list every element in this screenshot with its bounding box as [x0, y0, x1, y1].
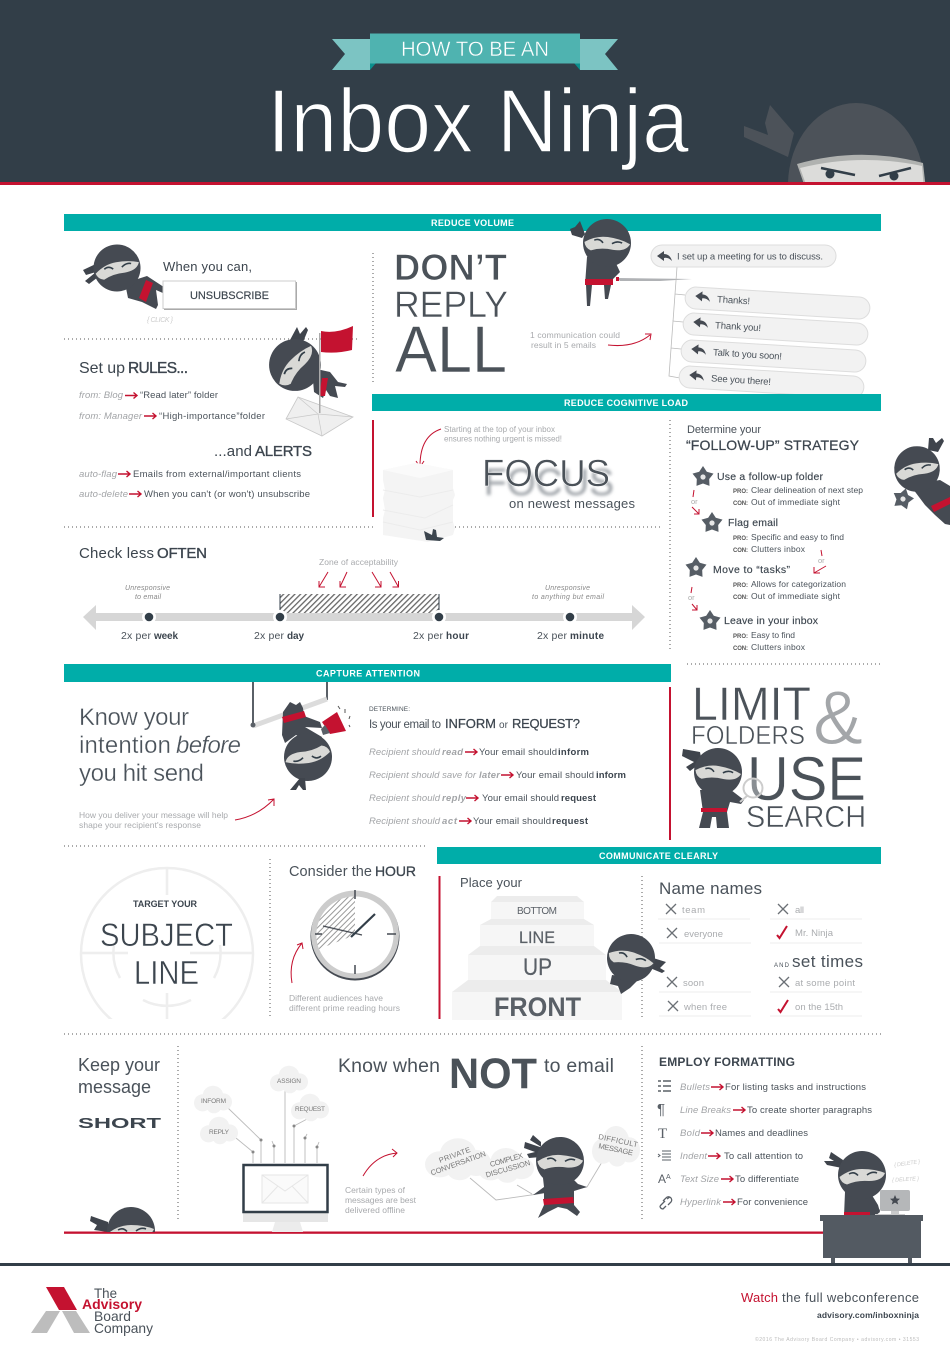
heading: and set times: set times	[792, 952, 863, 971]
cloud: difficult message: MESSAGE	[598, 1141, 634, 1157]
determine heading: DETERMINE:	[369, 706, 410, 713]
item: when free: when free	[683, 1002, 727, 1013]
ribbon: how to be an	[332, 34, 618, 70]
rule 2: from: Manager	[79, 411, 143, 422]
text: short: SHORT	[78, 1115, 161, 1132]
timeline labels: 2x per	[537, 630, 568, 642]
heading	[686, 424, 860, 453]
footer call to action: Watch	[741, 1290, 778, 1305]
row: line breaks: To create shorter paragraphs	[747, 1105, 872, 1116]
headline	[394, 247, 508, 386]
timeline labels: 2x per	[254, 630, 284, 642]
determine heading: or	[499, 720, 509, 731]
ninja flying toward button	[83, 241, 176, 309]
unsubscribe button	[163, 281, 297, 310]
timeline labels: hour	[446, 631, 469, 642]
reply: talk to you soon: Talk to you soon!	[713, 347, 782, 363]
row: read: Your email should	[479, 747, 557, 758]
text: target your: TARGET YOUR	[133, 899, 198, 909]
row: text size: A	[666, 1174, 671, 1181]
headline: intention	[79, 732, 171, 759]
row: line breaks: ¶	[657, 1101, 665, 1118]
heading: Check less	[79, 545, 154, 562]
ninja with magnifier	[682, 744, 762, 828]
footer logo	[31, 1285, 153, 1336]
ninja with sword	[570, 216, 692, 306]
header ninja peeking	[744, 103, 926, 182]
text: subject line	[100, 917, 233, 991]
text: subject line: LINE	[134, 954, 199, 991]
cloud: difficult message: DIFFICULT	[598, 1132, 639, 1149]
cloud: complex discussion	[478, 1148, 534, 1183]
list underlines	[658, 919, 862, 1016]
row: indent: To call attention to	[724, 1151, 803, 1162]
heading: set up rules: Set up	[79, 360, 125, 377]
reply: thanks: Thanks!	[717, 294, 750, 307]
note: different audiences: Different audiences have	[289, 993, 383, 1003]
focus wordmark with blurred echo: FOCUS	[482, 453, 610, 495]
headline: Know your	[79, 704, 189, 731]
footer logo: Board	[94, 1308, 131, 1324]
clock	[310, 890, 400, 980]
panel: limit folders and use search	[682, 676, 866, 834]
rule 1	[79, 390, 218, 401]
or connectors: or	[818, 556, 825, 565]
panel: know when not to email	[194, 1050, 640, 1232]
ninja at desk: { DELETE }	[892, 1176, 919, 1184]
headline: before	[176, 732, 241, 759]
target graphic	[80, 867, 254, 1019]
row: save for later: Recipient should save for	[369, 770, 477, 781]
note: starting at top: Starting at the top of your inbox	[444, 425, 555, 434]
ninja peeking around divider	[601, 928, 666, 994]
item: on the 15th	[778, 1000, 843, 1013]
reply: see you there	[678, 366, 864, 394]
option: leave in inbox: CON:	[733, 646, 748, 652]
wordmark	[691, 676, 866, 834]
reply: see you there: See you there!	[711, 373, 771, 388]
copyright: ©2016 The Advisory Board Company • advisory.com • 31553	[755, 1336, 919, 1343]
cloud: reply	[200, 1117, 238, 1144]
item: all	[778, 904, 804, 916]
timeline labels: 2x per	[121, 630, 152, 642]
footer logo: Advisory	[82, 1296, 142, 1312]
note: starting at top	[416, 425, 562, 467]
option: flag email: PRO:	[733, 536, 748, 542]
item: everyone: everyone	[684, 929, 723, 940]
heading: and alerts	[214, 443, 312, 460]
item: team	[666, 904, 705, 916]
row: text size: To differentiate	[735, 1174, 799, 1185]
heading: EMPLOY FORMATTING	[659, 1055, 795, 1069]
cloud: inform: INFORM	[201, 1098, 226, 1105]
reply: thank you	[683, 312, 868, 346]
headline: you hit send	[79, 760, 204, 787]
footer rule	[0, 1263, 950, 1266]
cloud connector lines	[228, 1090, 319, 1163]
ninja peeking above rule	[90, 1207, 155, 1232]
reply: thanks	[685, 286, 870, 320]
option: move to tasks	[686, 557, 846, 601]
note: certain types: delivered offline	[345, 1205, 405, 1215]
text: when you can: When you can,	[163, 259, 252, 274]
item: soon	[667, 977, 704, 989]
wordmark: &	[813, 676, 863, 761]
timeline arrow	[83, 605, 645, 630]
cloud: difficult message	[592, 1126, 640, 1167]
row: read: read	[442, 747, 463, 758]
steps: BOTTOM	[517, 906, 557, 917]
cloud: private conversation	[425, 1138, 491, 1180]
panel: check less often	[79, 545, 645, 642]
row: act	[369, 816, 589, 827]
alert 1: Emails from external/important clients	[133, 469, 301, 480]
unsubscribe button: UNSUBSCRIBE	[190, 290, 269, 302]
item: mr ninja: Mr. Ninja	[795, 928, 834, 939]
heading	[289, 863, 416, 880]
ninja at desk	[824, 1151, 921, 1216]
main title: Inbox Ninja	[267, 72, 690, 172]
heading: Know when	[338, 1055, 440, 1077]
headline	[79, 704, 241, 787]
row: act: request	[552, 816, 589, 827]
desk	[820, 1215, 923, 1263]
row: read: inform	[558, 747, 589, 758]
item: when free	[668, 1001, 727, 1013]
panel: employ formatting	[657, 1055, 923, 1263]
dotted dividers	[64, 253, 881, 1220]
reply tree connector	[669, 267, 685, 378]
option: leave in inbox	[700, 610, 819, 652]
row: indent	[658, 1151, 803, 1162]
option: move to tasks: CON:	[733, 595, 748, 601]
timeline labels: day	[287, 631, 304, 642]
ninja juggling clouds	[524, 1135, 587, 1218]
text: place your: Place your	[460, 875, 523, 890]
panel: consider the hour	[289, 863, 416, 1013]
headline: DON’T	[394, 247, 507, 288]
rule 2	[79, 411, 265, 422]
heading: “FOLLOW-UP” STRATEGY	[686, 437, 860, 453]
ribbon: how to be an: HOW TO BE AN	[401, 38, 549, 61]
row: hyperlink: Hyperlink	[680, 1197, 722, 1208]
section bar: communicate clearly	[437, 847, 881, 864]
item: mr ninja	[777, 926, 834, 939]
hanging ninja with megaphone	[250, 682, 350, 790]
or connectors	[688, 490, 826, 610]
wordmark: SEARCH	[746, 799, 866, 834]
option: follow-up folder: Use a follow-up folder	[717, 471, 824, 483]
heading: NOT	[449, 1050, 537, 1098]
section bar: reduce cognitive load	[372, 394, 881, 411]
row: text size	[658, 1172, 799, 1186]
zone of acceptability	[280, 557, 440, 614]
string lines	[470, 1162, 602, 1200]
row: act: act	[442, 816, 458, 827]
wordmark: USE	[747, 745, 866, 814]
item: all: all	[795, 905, 804, 916]
heading: Consider the	[289, 864, 372, 880]
row: reply: Recipient should	[369, 793, 441, 804]
steps	[452, 896, 622, 1022]
heading: and alerts: ...and	[214, 443, 252, 460]
determine heading: INFORM	[445, 716, 496, 731]
row: indent: Indent	[680, 1151, 707, 1162]
panel: don't reply all	[394, 216, 870, 399]
heading: OFTEN	[157, 545, 207, 562]
text: keep your message: Keep your	[78, 1055, 160, 1075]
option: leave in inbox: Leave in your inbox	[724, 615, 819, 627]
zone of acceptability: Zone of acceptability	[319, 557, 399, 567]
rule 1: from: Blog	[79, 390, 124, 401]
row: line breaks	[657, 1101, 872, 1118]
option: follow-up folder: Out of immediate sight	[751, 497, 841, 507]
determine heading: Is your email to	[369, 719, 441, 731]
row: bullets	[658, 1081, 866, 1093]
reply: talk to you soon	[681, 339, 866, 373]
timeline labels: 2x per	[413, 630, 444, 642]
note: different audiences: different prime reading hours	[289, 1003, 400, 1013]
row: hyperlink: For convenience	[737, 1197, 808, 1208]
heading	[79, 545, 207, 562]
reply: thank you: Thank you!	[715, 320, 761, 334]
text: subject line: SUBJECT	[100, 917, 233, 953]
heading: set up rules: RULES...	[128, 360, 188, 377]
text: on newest messages: on newest messages	[509, 496, 636, 511]
heading: name names: Name names	[659, 879, 762, 898]
alert 2: auto-delete	[79, 489, 128, 500]
row: save for later: inform	[596, 770, 626, 781]
row: bold	[658, 1126, 808, 1142]
item: everyone	[667, 928, 723, 940]
panel: target subject line	[80, 867, 254, 1019]
determine heading	[369, 706, 580, 731]
heading: and alerts: ALERTS	[255, 443, 312, 460]
option: leave in inbox: Easy to find	[751, 630, 795, 640]
determine heading: REQUEST?	[512, 716, 580, 731]
row: act: Recipient should	[369, 816, 441, 827]
option: flag email: Specific and easy to find	[751, 532, 844, 542]
rule 2: “High-importance”folder	[159, 411, 265, 422]
alert 2: When you can't (or won't) unsubscribe	[144, 489, 310, 500]
ninja on envelope with flag	[258, 326, 353, 436]
heading: and set times: AND	[774, 963, 790, 969]
red accent rules	[64, 420, 824, 1234]
paper stack with ninja legs	[383, 463, 455, 542]
heading: HOUR	[375, 863, 416, 879]
section bar: reduce volume	[64, 214, 881, 231]
row: reply: Your email should	[482, 793, 559, 804]
heading: to email	[544, 1055, 614, 1077]
ninja at desk: { DELETE }	[894, 1159, 921, 1169]
footer call to action: advisory.com/inboxninja	[817, 1310, 919, 1320]
note: one communication: result in 5 emails	[531, 340, 596, 350]
header banner	[0, 0, 950, 185]
option: move to tasks: PRO:	[733, 583, 748, 589]
row: bullets: Bullets	[680, 1082, 710, 1093]
option: move to tasks: Out of immediate sight	[751, 591, 841, 601]
note: one communication: 1 communication could	[530, 330, 620, 340]
item: at some point: at some point	[795, 978, 855, 989]
text: keep your message: message	[78, 1077, 151, 1097]
alert 1: auto-flag	[79, 469, 118, 480]
row: bold: T	[658, 1126, 667, 1142]
note: certain types: messages are best	[345, 1195, 417, 1205]
item: soon: soon	[683, 978, 704, 989]
section bar: capture attention: CAPTURE ATTENTION	[316, 668, 420, 678]
row: reply	[369, 793, 597, 804]
panel: place your bottom line up front	[452, 875, 666, 1022]
cloud: assign: ASSIGN	[277, 1078, 301, 1085]
heading: set up rules	[79, 360, 188, 377]
email bubble: original: I set up a meeting for us to discuss.	[677, 252, 823, 262]
section bar: communicate clearly: COMMUNICATE CLEARLY	[599, 851, 718, 861]
option: flag email: Clutters inbox	[751, 544, 806, 554]
panel: name names and set times	[658, 879, 863, 1016]
row: text size: Text Size	[680, 1174, 719, 1185]
text: keep your message	[78, 1055, 160, 1097]
cloud: assign	[270, 1066, 308, 1093]
note: how you deliver: How you deliver your message will help	[79, 810, 228, 820]
headline: REPLY	[394, 284, 508, 325]
footer call to action: the full webconference	[782, 1290, 919, 1305]
panel: follow-up strategy	[686, 424, 950, 652]
note: how you deliver: shape your recipient's response	[79, 820, 201, 830]
timeline labels: week	[153, 631, 178, 642]
row: reply: reply	[442, 793, 467, 804]
panel: keep your message short	[78, 1058, 161, 1232]
section bar: reduce volume: REDUCE VOLUME	[431, 218, 514, 228]
note: different audiences	[289, 943, 400, 1013]
or connectors: or	[688, 593, 695, 602]
note: one communication	[530, 330, 651, 350]
rule 1: “Read later” folder	[140, 390, 218, 401]
ninja with shuriken	[891, 438, 950, 525]
steps: LINE	[519, 928, 555, 947]
panel: rules and alerts	[79, 326, 353, 500]
panel: know your intention	[79, 682, 626, 830]
footer logo: The	[94, 1285, 117, 1301]
cloud: complex discussion: DISCUSSION	[485, 1158, 531, 1179]
cloud: complex discussion: COMPLEX	[489, 1151, 524, 1169]
row: act: Your email should	[473, 816, 551, 827]
row: read	[369, 747, 589, 758]
cloud: inform	[194, 1086, 232, 1113]
row: save for later	[369, 770, 626, 781]
heading: Determine your	[687, 424, 761, 436]
footer logo: Company	[94, 1320, 153, 1336]
note: unresponsive to email	[125, 585, 170, 601]
click note: { CLICK }	[147, 317, 174, 324]
option: follow-up folder: PRO:	[733, 489, 748, 495]
footer call to action	[741, 1290, 919, 1320]
note: starting at top: ensures nothing urgent is missed!	[444, 434, 562, 444]
or connectors: or	[691, 497, 698, 506]
item: team: team	[682, 905, 705, 916]
option: flag email	[702, 512, 844, 554]
cloud: reply: REPLY	[209, 1129, 230, 1136]
option: leave in inbox: PRO:	[733, 634, 748, 640]
note: unresponsive to anything	[532, 585, 604, 601]
row: bullets: For listing tasks and instructions	[725, 1082, 866, 1093]
focus wordmark with blurred echo: FOCUS	[484, 462, 614, 504]
wordmark: LIMIT	[692, 677, 811, 730]
note: certain types	[345, 1149, 417, 1215]
item: on the 15th: on the 15th	[795, 1002, 843, 1013]
row: bold: Names and deadlines	[715, 1128, 808, 1139]
row: text size: A	[658, 1172, 666, 1186]
row: read: Recipient should	[369, 747, 441, 758]
note: unresponsive to email: Unresponsive	[125, 585, 170, 592]
row: save for later: Your email should	[516, 770, 594, 781]
option: follow-up folder	[692, 466, 863, 507]
cloud: request	[291, 1094, 329, 1121]
headline: ALL	[395, 312, 507, 386]
option: follow-up folder: CON:	[733, 501, 748, 507]
option: follow-up folder: Clear delineation of next step	[751, 485, 863, 495]
email bubble: original	[651, 245, 836, 267]
row: reply: request	[561, 793, 597, 804]
heading	[338, 1050, 614, 1098]
section bar: capture attention	[64, 664, 671, 682]
wordmark: FOLDERS	[691, 720, 805, 750]
note: unresponsive to anything: Unresponsive	[545, 585, 590, 592]
option: flag email: CON:	[733, 548, 748, 554]
steps: UP	[523, 954, 552, 981]
option: move to tasks: Allows for categorization	[751, 579, 846, 589]
row: save for later: later	[479, 770, 501, 781]
note: certain types: Certain types of	[345, 1185, 406, 1195]
note: unresponsive to email: to email	[135, 594, 161, 601]
timeline labels	[121, 630, 604, 642]
cloud: private conversation: CONVERSATION	[429, 1149, 487, 1177]
option: leave in inbox: Clutters inbox	[751, 642, 806, 652]
option: move to tasks: Move to “tasks”	[713, 564, 790, 576]
row: line breaks: Line Breaks	[680, 1105, 731, 1116]
panel: unsubscribe	[83, 241, 297, 324]
row: hyperlink	[660, 1197, 808, 1209]
panel: focus	[383, 425, 636, 542]
email replies	[679, 286, 870, 399]
cloud: request: REQUEST	[295, 1106, 325, 1113]
note: how you deliver	[79, 799, 274, 830]
note: unresponsive to anything: to anything but email	[532, 594, 604, 601]
option: flag email: Flag email	[728, 517, 778, 529]
timeline labels: minute	[570, 631, 604, 642]
row: bold: Bold	[680, 1128, 701, 1139]
section bar: reduce cognitive load: REDUCE COGNITIVE LOAD	[564, 398, 688, 408]
monitor with envelope	[243, 1165, 328, 1232]
cloud: private conversation: PRIVATE	[438, 1145, 472, 1165]
steps: FRONT	[494, 992, 581, 1022]
